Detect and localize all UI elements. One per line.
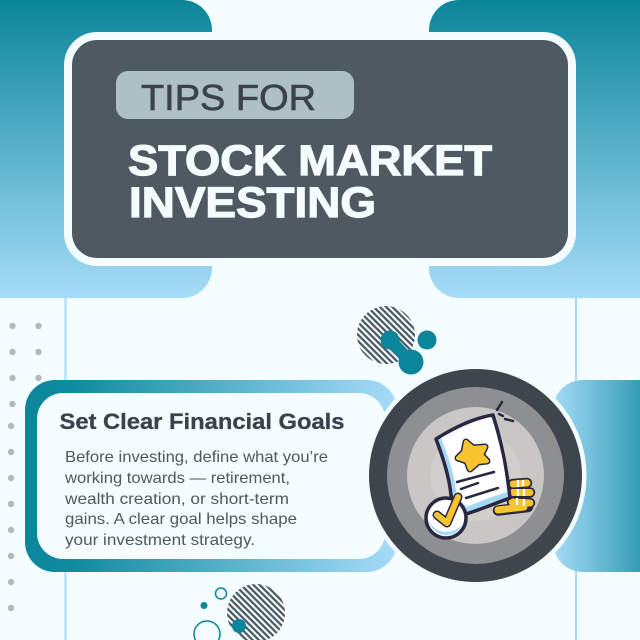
- right vertical line: [575, 298, 577, 640]
- title panel: [64, 32, 576, 266]
- left vertical line: [64, 298, 66, 640]
- icon: sparks: [497, 402, 513, 421]
- top decoration: hatched circle and teal dots: [357, 306, 436, 374]
- icon: check badge: [426, 497, 466, 538]
- card body text: wealth creation, or short-term: [64, 491, 289, 508]
- icon: star: [458, 442, 487, 469]
- header band: left gradient block: [0, 0, 212, 298]
- right side tab: [553, 380, 640, 572]
- card body text: working towards — retirement,: [64, 470, 290, 487]
- header band: right gradient block: [429, 0, 640, 298]
- bottom decoration: hatched circle and rings: [194, 584, 285, 640]
- subtitle pill: [116, 71, 354, 119]
- card heading: Set Clear Financial Goals: [60, 409, 344, 434]
- title text: [128, 137, 492, 227]
- icon: document: [436, 415, 510, 514]
- tip card: [25, 380, 397, 572]
- title text: STOCK MARKET: [128, 137, 492, 185]
- icon: coins: [498, 480, 530, 510]
- dot column decoration: [8, 323, 42, 611]
- card body text: [64, 449, 328, 549]
- title text: INVESTING: [129, 179, 376, 227]
- subtitle pill: TIPS FOR: [141, 77, 316, 118]
- card body text: your investment strategy.: [65, 532, 255, 549]
- card body text: gains. A clear goal helps shape: [65, 511, 297, 528]
- card body text: Before investing, define what you’re: [65, 449, 328, 466]
- icon medallion: [364, 364, 586, 586]
